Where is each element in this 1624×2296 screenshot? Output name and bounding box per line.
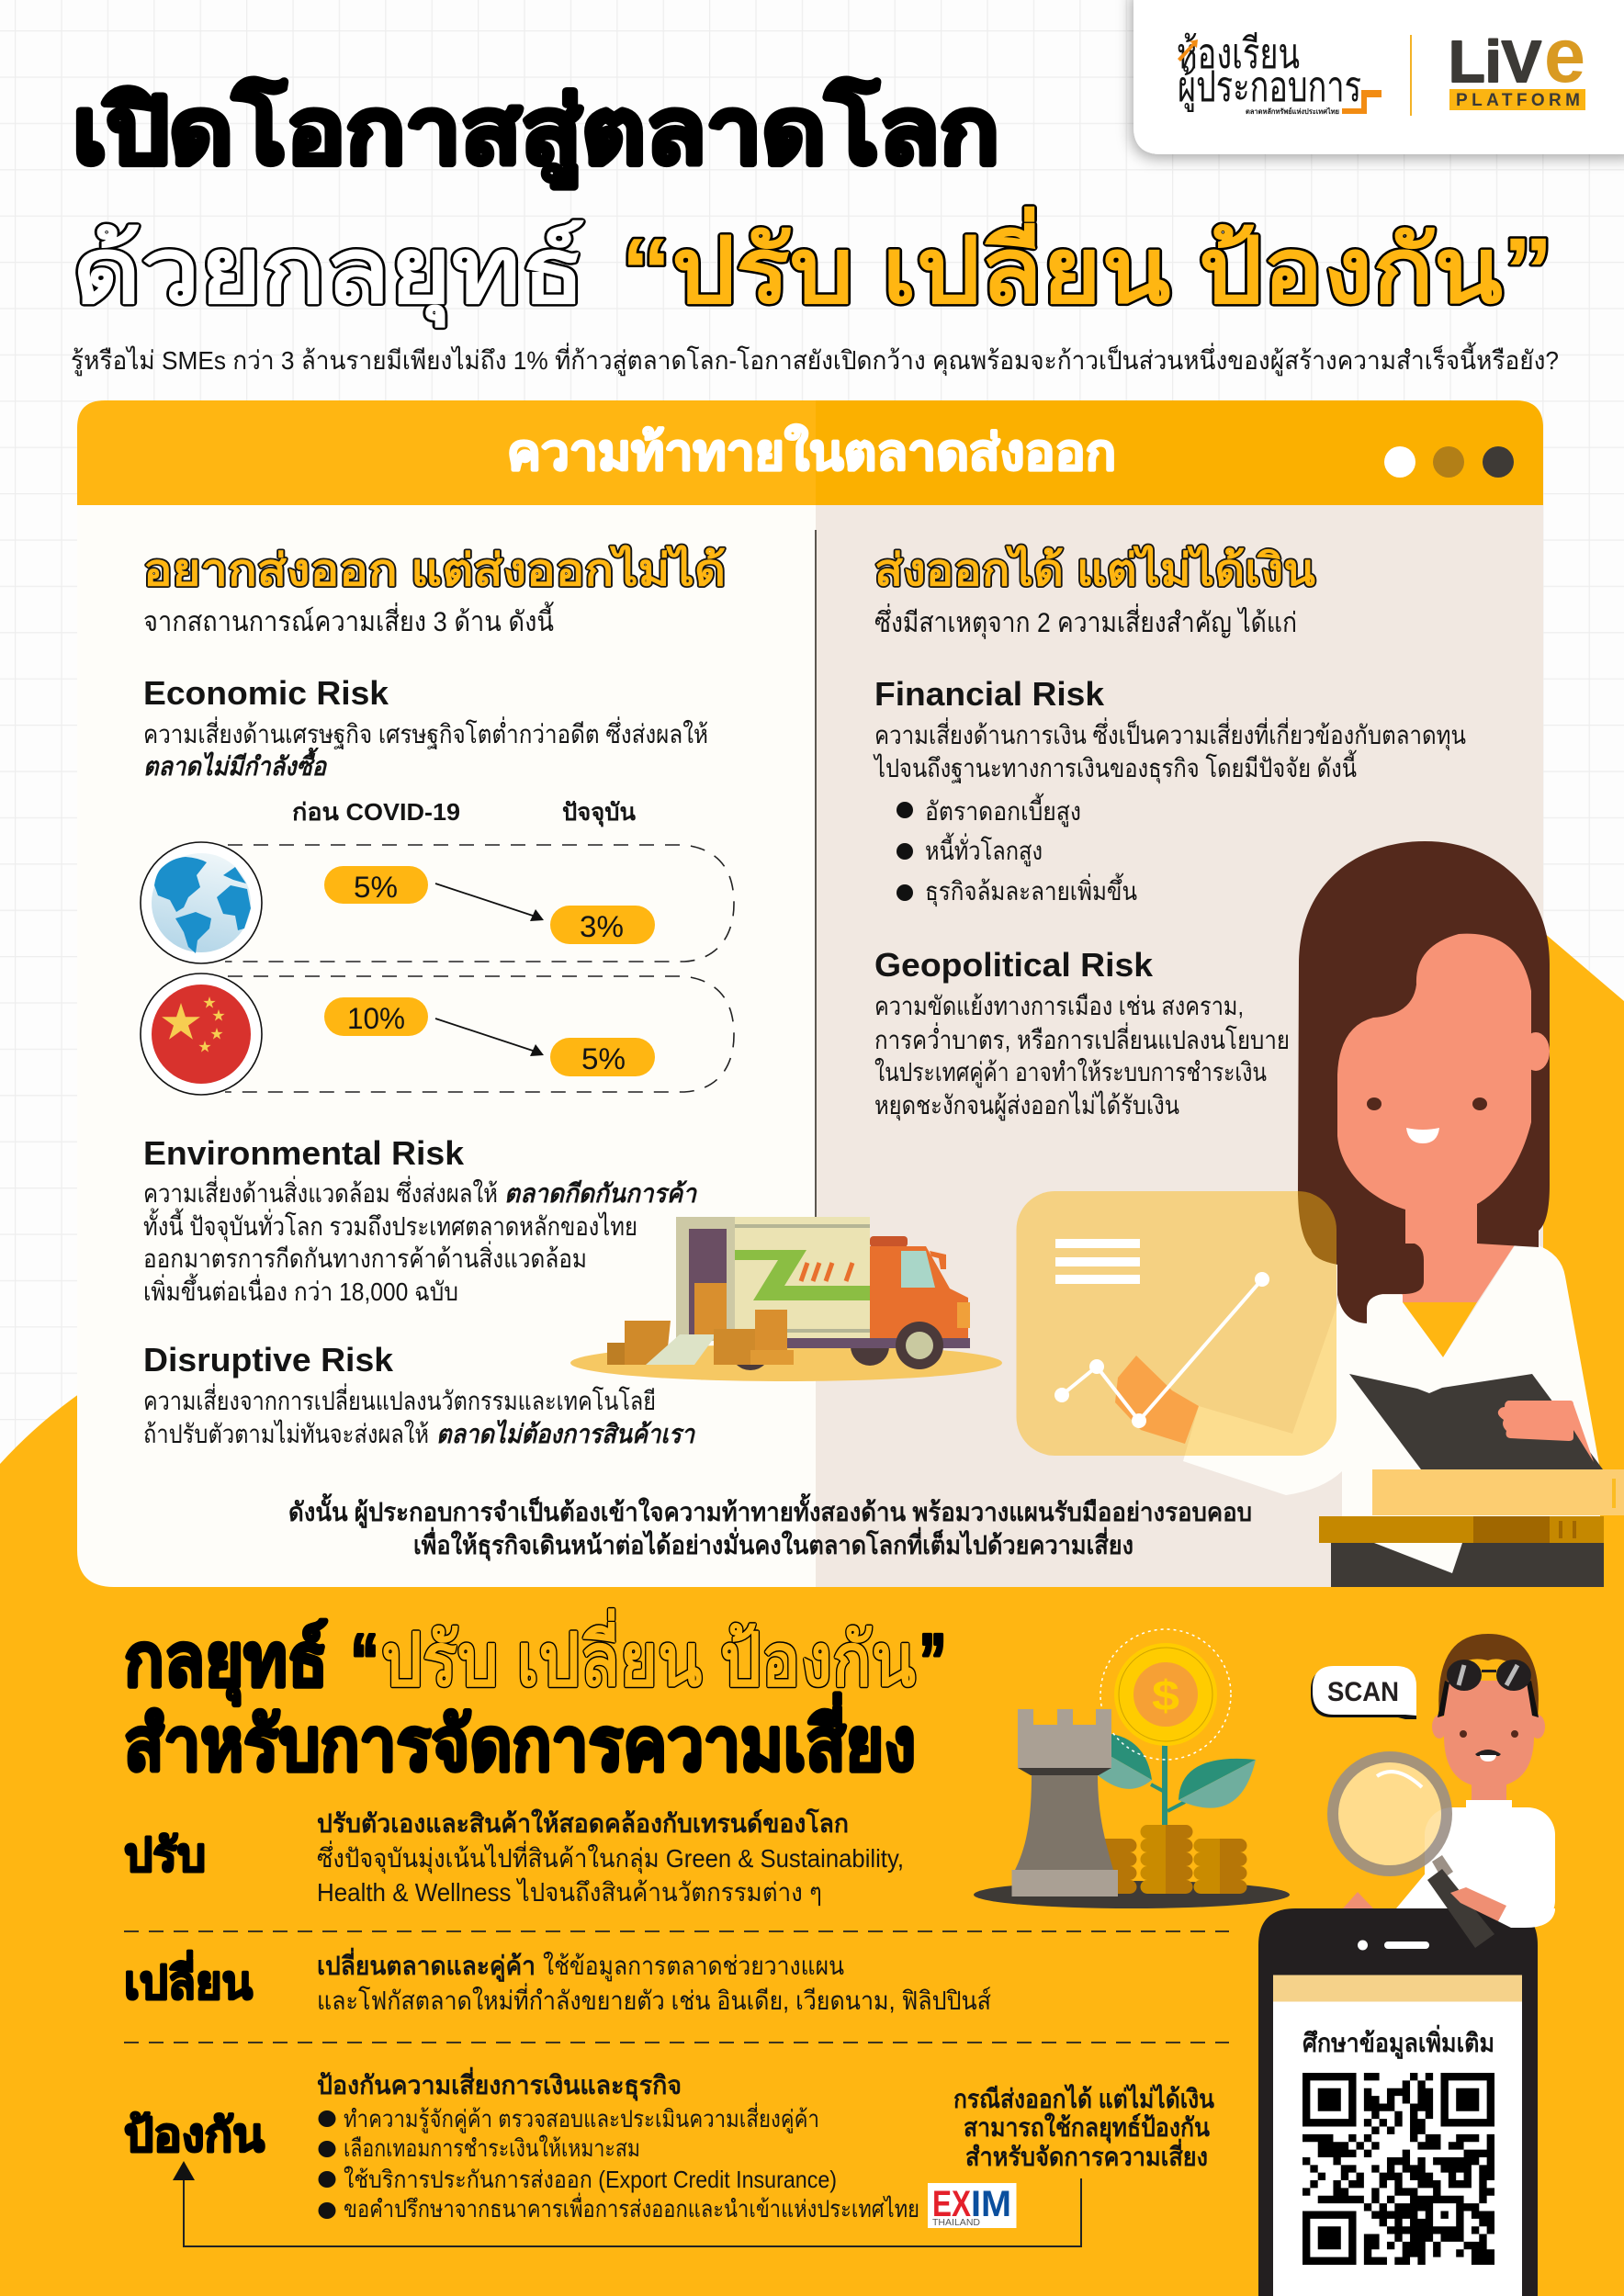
- strategy heading: ”: [919, 1619, 946, 1701]
- chart headers: ปัจจุบัน: [562, 798, 636, 827]
- financial risk text: ไปจนถึงฐานะทางการเงินของธุรกิจ โดยมีปัจจัย ดังนี้: [873, 749, 1357, 784]
- environmental risk text: เพิ่มขึ้นต่อเนื่อง กว่า 18,000 ฉบับ: [143, 1273, 458, 1306]
- disruptive risk text: ตลาดไม่ต้องการสินค้าเรา: [436, 1419, 695, 1448]
- row: change: และโฟกัสตลาดใหม่ที่กำลังขยายตัว เช่น อินเดีย, เวียดนาม, ฟิลิปปินส์: [317, 1983, 991, 2015]
- strategy heading: กลยุทธ์: [124, 1619, 328, 1706]
- logo: Live Platform: PLATFORM: [1456, 91, 1580, 110]
- conclusion text: [288, 1492, 1252, 1561]
- row: change: ใช้ข้อมูลการตลาดช่วยวางแผน: [543, 1951, 844, 1982]
- environmental risk text: ตลาดกีดกันการค้า: [504, 1179, 697, 1208]
- row: adapt: ซึ่งปัจจุบันมุ่งเน้นไปที่สินค้าในกลุ่ม Green & Sustainability,: [317, 1840, 904, 1874]
- illustration: businesswoman: [1016, 841, 1624, 1587]
- growth row: world: [141, 842, 734, 963]
- environmental risk text: ออกมาตรการกีดกันทางการค้าด้านสิ่งแวดล้อม: [143, 1241, 587, 1273]
- pill: 3%: 3%: [580, 910, 624, 943]
- strategy heading: ปรับ เปลี่ยน ป้องกัน: [381, 1608, 916, 1701]
- geopolitical risk text: Geopolitical Risk: [874, 946, 1154, 984]
- callout: สำหรับจัดการความเสี่ยง: [965, 2138, 1208, 2171]
- row: change: เปลี่ยนตลาดและคู่ค้า: [317, 1947, 536, 1982]
- QR code: [1303, 2073, 1494, 2265]
- logo: EXIM Thailand: [928, 2183, 1016, 2228]
- logo card: [1133, 0, 1624, 154]
- icon: China flag: [141, 974, 262, 1095]
- left column heading: อยากส่งออก แต่ส่งออกไม่ได้: [143, 544, 726, 595]
- disruptive risk text: Disruptive Risk: [143, 1341, 394, 1379]
- pill: 5%: [550, 1038, 655, 1076]
- panel heading: ความท้าทายในตลาดส่งออก: [507, 423, 1116, 480]
- row: adapt: ปรับ: [124, 1829, 206, 1881]
- row: change: [124, 1947, 991, 2015]
- icon: delivery truck: [570, 1217, 1002, 1381]
- conclusion text: ดังนั้น ผู้ประกอบการจำเป็นต้องเข้าใจความท้าทายทั้งสองด้าน พร้อมวางแผนรับมืออย่างรอบคอบ: [288, 1492, 1252, 1528]
- disruptive risk text: ถ้าปรับตัวตามไม่ทันจะส่งผลให้: [143, 1419, 429, 1448]
- title: [73, 77, 1553, 328]
- right column heading: ซึ่งมีสาเหตุจาก 2 ความเสี่ยงสำคัญ ได้แก่: [874, 603, 1297, 640]
- card: growth chart: [1016, 1191, 1336, 1456]
- environmental risk text: Environmental Risk: [143, 1134, 465, 1172]
- pill: 5%: 5%: [354, 871, 398, 904]
- logo: Live Platform: e: [1544, 12, 1585, 98]
- illustration: rook and money plant: $: [1152, 1671, 1179, 1719]
- title: เปิดโอกาสสู่ตลาดโลก: [73, 77, 999, 188]
- financial risk text: อัตราดอกเบี้ยสูง: [925, 793, 1081, 827]
- logo: Live Platform: LiV: [1449, 28, 1541, 95]
- economic risk text: Economic Risk: [143, 674, 389, 712]
- geopolitical risk text: ในประเทศคู่ค้า อาจทำให้ระบบการชำระเงิน: [874, 1057, 1267, 1088]
- economic risk text: ความเสี่ยงด้านเศรษฐกิจ เศรษฐกิจโตต่ำกว่าอดีต ซึ่งส่งผลให้: [143, 716, 708, 749]
- growth row: China: [141, 974, 734, 1095]
- conclusion text: เพื่อให้ธุรกิจเดินหน้าต่อได้อย่างมั่นคงในตลาดโลกที่เต็มไปด้วยความเสี่ยง: [413, 1526, 1133, 1561]
- geopolitical risk text: [874, 946, 1290, 1121]
- geopolitical risk text: การคว่ำบาตร, หรือการเปลี่ยนแปลงนโยบาย: [874, 1022, 1290, 1054]
- row: adapt: [124, 1807, 904, 1907]
- geopolitical risk text: หยุดชะงักจนผู้ส่งออกไม่ได้รับเงิน: [874, 1091, 1179, 1121]
- row: protect: ขอคำปรึกษาจากธนาคารเพื่อการส่งออกและนำเข้าแห่งประเทศไทย: [344, 2192, 919, 2223]
- strategy heading: สำหรับการจัดการความเสี่ยง: [124, 1693, 916, 1785]
- pill: 10%: 10%: [347, 1002, 405, 1035]
- disruptive risk text: [143, 1341, 695, 1448]
- arrow: [435, 884, 544, 921]
- financial risk text: Financial Risk: [874, 675, 1105, 713]
- left column heading: จากสถานการณ์ความเสี่ยง 3 ด้าน ดังนี้: [143, 602, 554, 637]
- logo: SME classroom: ห้องเรียน: [1177, 29, 1300, 77]
- title: “ปรับ เปลี่ยน ป้องกัน”: [621, 206, 1553, 322]
- financial risk text: หนี้ทั่วโลกสูง: [925, 832, 1043, 867]
- pill: 3%: [550, 906, 655, 944]
- phone caption: ศึกษาข้อมูลเพิ่มเติม: [1303, 2024, 1494, 2059]
- chart headers: [292, 798, 636, 827]
- row: change: เปลี่ยน: [124, 1951, 253, 2009]
- row: protect: ป้องกัน: [124, 2110, 265, 2161]
- row: protect: ทำความรู้จักคู่ค้า ตรวจสอบและประเมินความเสี่ยงคู่ค้า: [344, 2102, 819, 2133]
- pill: 5%: [324, 866, 428, 904]
- logo: SME classroom: [1177, 29, 1382, 116]
- environmental risk text: ความเสี่ยงด้านสิ่งแวดล้อม ซึ่งส่งผลให้: [143, 1176, 498, 1208]
- icon: globe: [141, 842, 262, 963]
- phone with QR code: [1258, 1908, 1538, 2296]
- speech bubble: SCAN: SCAN: [1327, 1677, 1399, 1707]
- environmental risk text: [143, 1134, 697, 1306]
- financial risk text: ความเสี่ยงด้านการเงิน ซึ่งเป็นความเสี่ยงที่เกี่ยวข้องกับตลาดทุน: [874, 717, 1466, 751]
- logo: Live Platform: [1449, 12, 1585, 110]
- callout: กรณีส่งออกได้ แต่ไม่ได้เงิน: [953, 2084, 1214, 2113]
- window dots: [1384, 446, 1514, 478]
- row: adapt: ปรับตัวเองและสินค้าให้สอดคล้องกับเทรนด์ของโลก: [317, 1807, 849, 1838]
- right column heading: [874, 544, 1315, 640]
- chart headers: ก่อน COVID-19: [292, 798, 460, 826]
- panel: challenges: [77, 400, 1543, 1587]
- row: protect: [124, 2066, 919, 2223]
- logo: SME classroom: ตลาดหลักทรัพย์แห่งประเทศไทย: [1246, 107, 1339, 116]
- financial risk text: [873, 675, 1466, 907]
- arrow: callout to protect: [173, 2161, 1081, 2246]
- left column heading: [143, 544, 726, 637]
- financial risk text: ธุรกิจล้มละลายเพิ่มขึ้น: [925, 872, 1137, 907]
- callout: [953, 2084, 1214, 2171]
- pill: 10%: [324, 997, 428, 1036]
- logo: SME classroom: ผู้ประกอบการ: [1178, 62, 1361, 112]
- geopolitical risk text: ความขัดแย้งทางการเมือง เช่น สงคราม,: [874, 992, 1244, 1020]
- illustration: rook and money plant: [974, 1629, 1290, 1908]
- logo: EXIM Thailand: THAILAND: [932, 2218, 980, 2228]
- row: adapt: Health & Wellness ไปจนถึงสินค้านวัตกรรมต่าง ๆ: [317, 1878, 822, 1907]
- strategy heading: [124, 1608, 946, 1785]
- row: protect: ใช้บริการประกันการส่งออก (Export Credit Insurance): [344, 2166, 837, 2193]
- economic risk text: ตลาดไม่มีกำลังซื้อ: [143, 747, 328, 781]
- arrow: [435, 1019, 544, 1056]
- title: ด้วยกลยุทธ์: [73, 219, 585, 328]
- disruptive risk text: ความเสี่ยงจากการเปลี่ยนแปลงนวัตกรรมและเทคโนโลยี: [143, 1383, 656, 1415]
- callout: สามารถใช้กลยุทธ์ป้องกัน: [964, 2112, 1210, 2144]
- illustration: man with magnifier: [1333, 1634, 1555, 1928]
- right column heading: ส่งออกได้ แต่ไม่ได้เงิน: [874, 544, 1315, 595]
- intro text: รู้หรือไม่ SMEs กว่า 3 ล้านรายมีเพียงไม่ถึง 1% ที่ก้าวสู่ตลาดโลก-โอกาสยังเปิดกว้าง คุณพร้อมจะก้าวเป็นส่วนหนึ่งของผู้สร้างความสำเร็จนี้หรือยัง?: [71, 342, 1559, 377]
- strategy heading: “: [351, 1619, 378, 1701]
- pill: 5%: 5%: [581, 1042, 626, 1075]
- speech bubble: SCAN: [1311, 1666, 1416, 1719]
- row: protect: เลือกเทอมการชำระเงินให้เหมาะสม: [344, 2134, 640, 2162]
- logo: EXIM Thailand: EX: [932, 2184, 971, 2224]
- logo: EXIM Thailand: IM: [971, 2184, 1011, 2224]
- environmental risk text: ทั้งนี้ ปัจจุบันทั่วโลก รวมถึงประเทศตลาดหลักของไทย: [143, 1208, 637, 1243]
- economic risk text: [143, 674, 708, 781]
- row: protect: ป้องกันความเสี่ยงการเงินและธุรกิจ: [317, 2066, 682, 2101]
- magnifier handle, sleeve and hand: [1427, 1855, 1555, 1948]
